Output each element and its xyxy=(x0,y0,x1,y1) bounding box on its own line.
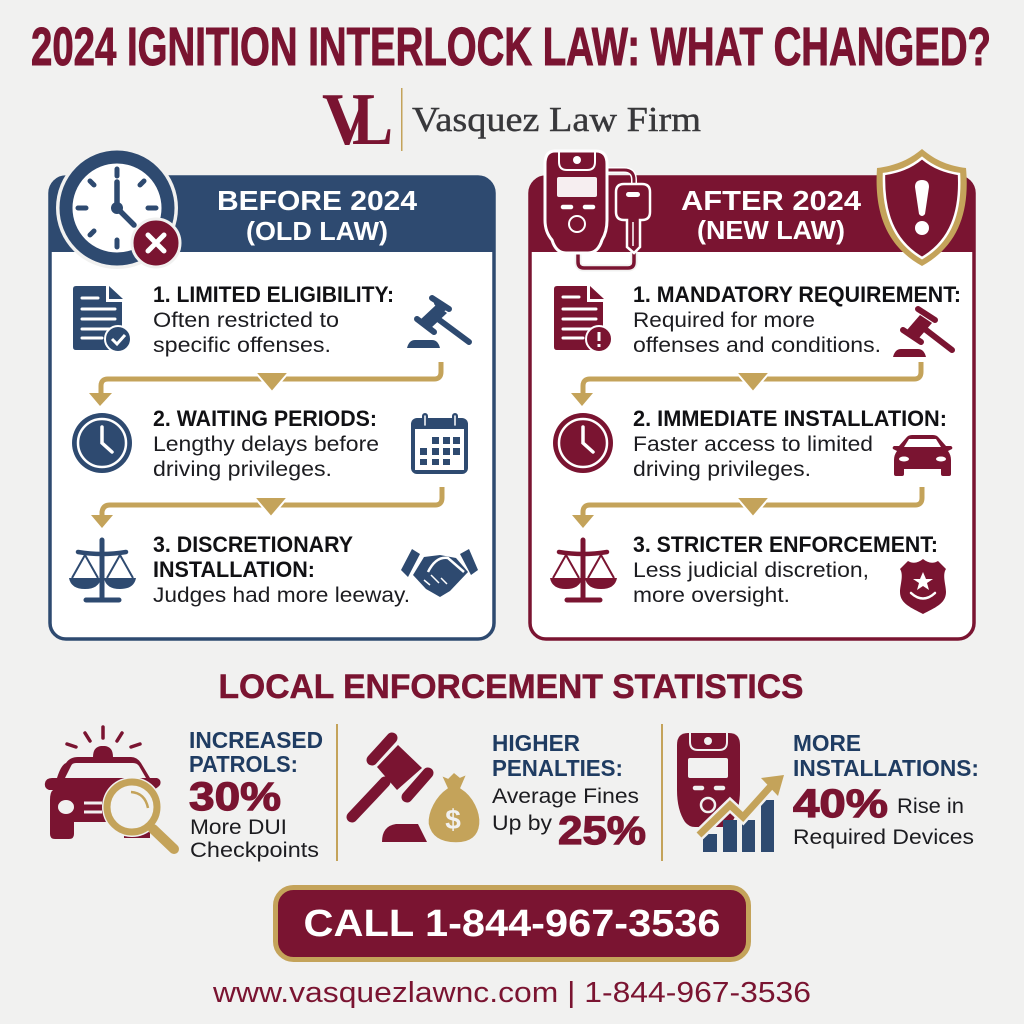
footer contact line: www.vasquezlawnc.com | 1-844-967-3536 xyxy=(212,977,811,1009)
stat: increased patrols xyxy=(45,727,323,862)
icon: warning shield xyxy=(877,149,967,266)
stat: higher penalties: Average Fines xyxy=(492,785,639,808)
item 1: offenses and conditions. xyxy=(633,334,881,357)
item 2: Faster access to limited xyxy=(633,433,873,456)
logo: Vasquez Law Firm: L xyxy=(352,79,393,161)
item 2: driving privileges. xyxy=(633,458,811,481)
stat: higher penalties: HIGHER xyxy=(492,730,580,756)
call button xyxy=(276,888,748,960)
call button: CALL 1-844-967-3536 xyxy=(304,903,720,945)
item 2: driving privileges. xyxy=(153,458,332,481)
item 2: Lengthy delays before xyxy=(153,433,379,456)
item 2 xyxy=(553,406,952,481)
item 3: more oversight. xyxy=(633,584,790,607)
icon: device and growth chart xyxy=(677,733,784,852)
stat: more installations: MORE xyxy=(793,730,861,756)
icon: calendar xyxy=(411,416,468,474)
item 3: Judges had more leeway. xyxy=(153,584,410,607)
icon: police badge xyxy=(900,559,946,614)
stat: higher penalties xyxy=(352,730,646,853)
stat: higher penalties: Up by xyxy=(492,812,553,835)
heading: before 2024: BEFORE 2024 xyxy=(217,185,417,216)
heading: local enforcement statistics: LOCAL ENFORCEMENT STATISTICS xyxy=(218,668,804,706)
logo: Vasquez Law Firm: V xyxy=(322,79,372,161)
item 1: specific offenses. xyxy=(153,334,331,357)
item 3 xyxy=(550,532,946,614)
stat: increased patrols: More DUI xyxy=(190,816,287,839)
stat: more installations: Required Devices xyxy=(793,826,974,849)
panel: before 2024 xyxy=(49,147,495,639)
item 2: 2. IMMEDIATE INSTALLATION: xyxy=(633,406,947,431)
stat: increased patrols: Checkpoints xyxy=(190,839,319,862)
icon: gavel xyxy=(407,298,469,348)
item 1: Often restricted to xyxy=(153,309,339,332)
item 1 xyxy=(554,282,961,357)
arrow connector 1 xyxy=(89,362,441,406)
stat: higher penalties: 25% xyxy=(558,809,646,853)
icon: handshake xyxy=(401,549,478,597)
item 1: 1. LIMITED ELIGIBILITY: xyxy=(153,282,394,307)
item 3 xyxy=(69,532,478,607)
arrow connector 1 xyxy=(571,362,921,406)
icon: document alert xyxy=(554,286,612,352)
stat: increased patrols: PATROLS: xyxy=(189,751,298,777)
logo: Vasquez Law Firm: Vasquez Law Firm xyxy=(412,100,701,139)
icon: patrol car with magnifier xyxy=(45,727,174,849)
icon: clock xyxy=(72,413,132,473)
stat: more installations: Rise in xyxy=(897,795,964,818)
item 2 xyxy=(72,406,468,481)
icon: clock xyxy=(553,413,613,473)
divider xyxy=(336,724,338,861)
icon: gavel xyxy=(893,309,952,357)
panel header: before 2024 xyxy=(49,176,495,252)
heading: before 2024 xyxy=(217,185,417,246)
icon: gavel and money bag xyxy=(352,738,480,843)
item 3: 3. DISCRETIONARY xyxy=(153,532,353,557)
icon: interlock device and key xyxy=(545,151,650,268)
stat: increased patrols: INCREASED xyxy=(189,727,323,753)
icon: document check xyxy=(73,286,131,352)
heading: after 2024: (NEW LAW) xyxy=(697,215,845,245)
stat: more installations: 40% xyxy=(793,782,888,826)
item 1 xyxy=(73,282,469,357)
item 1: 1. MANDATORY REQUIREMENT: xyxy=(633,282,961,307)
stat: higher penalties: PENALTIES: xyxy=(492,755,623,781)
icon: scales xyxy=(550,540,617,600)
item 2: 2. WAITING PERIODS: xyxy=(153,406,377,431)
heading: after 2024 xyxy=(681,185,861,245)
panel: after 2024 xyxy=(529,149,975,639)
stat: more installations: INSTALLATIONS: xyxy=(793,755,979,781)
icon: scales xyxy=(69,540,136,600)
icon: gavel and money bag: $ xyxy=(445,804,461,835)
logo: Vasquez Law Firm xyxy=(322,79,701,161)
icon: car xyxy=(893,435,952,476)
panel header: after 2024 xyxy=(529,176,975,252)
heading: before 2024: (OLD LAW) xyxy=(246,216,388,246)
stat: increased patrols: 30% xyxy=(189,775,281,819)
item 1: Required for more xyxy=(633,309,815,332)
divider xyxy=(661,724,663,861)
item 3: Less judicial discretion, xyxy=(633,559,869,582)
arrow connector 2 xyxy=(572,487,922,528)
item 3: INSTALLATION: xyxy=(153,557,315,582)
icon: clock with x xyxy=(56,147,180,269)
heading: after 2024: AFTER 2024 xyxy=(681,185,861,216)
stat: more installations xyxy=(677,730,979,852)
item 3: 3. STRICTER ENFORCEMENT: xyxy=(633,532,938,557)
arrow connector 2 xyxy=(91,487,442,528)
